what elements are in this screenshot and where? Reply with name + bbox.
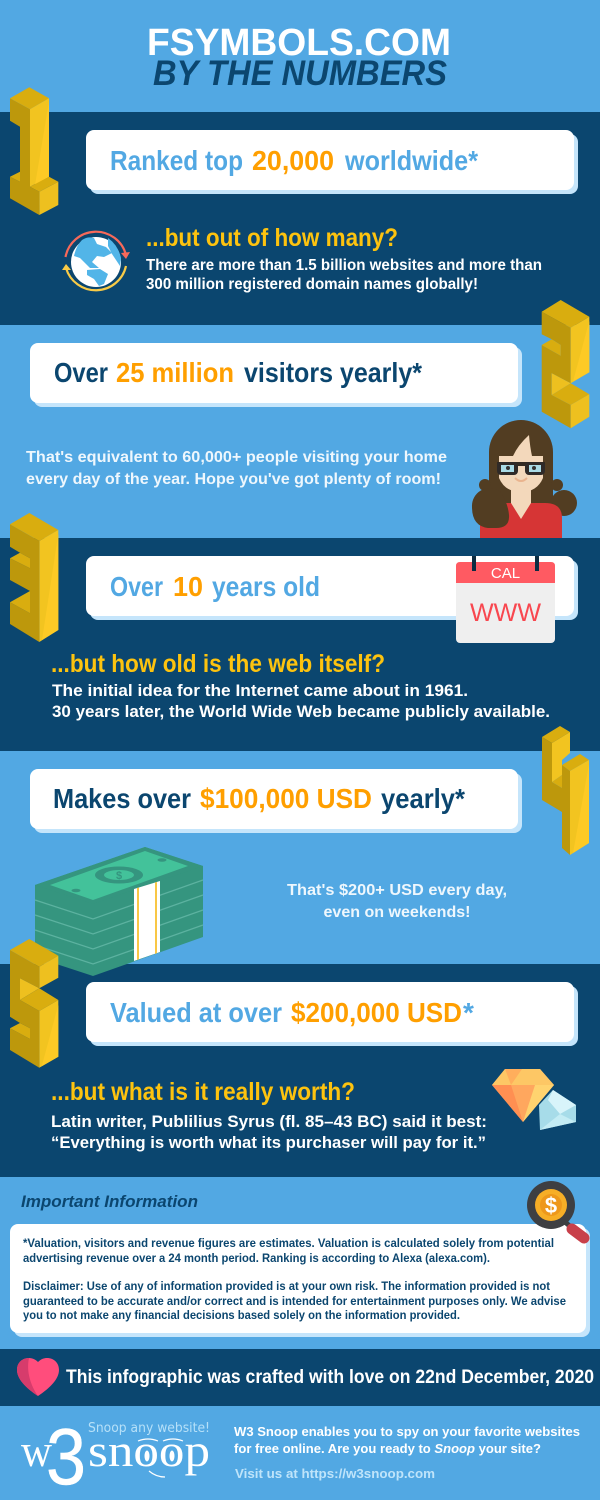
stat card: 25 million visitors: visitors yearly* [244, 357, 422, 388]
icon: diamonds [492, 1069, 576, 1130]
icon: heart [17, 1358, 59, 1396]
footer link: Visit us at https://w3snoop.com [235, 1467, 435, 1481]
subheading: ...but what is it really worth? [51, 1078, 355, 1106]
body text: That's $200+ USD every day, [287, 882, 507, 899]
icon: woman with glasses [472, 420, 577, 538]
body text: The initial idea for the Internet came about in 1961. [52, 682, 468, 700]
header panel [0, 0, 600, 112]
subtitle: BY THE NUMBERS [153, 54, 447, 93]
stat card: over 10 years: years old [212, 571, 320, 602]
panel: visitors [0, 325, 600, 538]
stat card: valued at $200,000 [86, 982, 578, 1046]
disclaimer card [10, 1224, 590, 1337]
icon: calendar: CAL [491, 565, 520, 582]
stat card: valued at $200,000: $200,000 USD [291, 997, 462, 1028]
title: FSYMBOLS.COM [147, 22, 451, 64]
panel: valuation [0, 964, 600, 1177]
icon: calendar [456, 556, 555, 643]
icon: globe with arrows [62, 232, 130, 290]
icon: magnifying glass with coin: $ [545, 1193, 557, 1218]
stat card: valued at $200,000: * [463, 997, 474, 1028]
disclaimer card: guaranteed to be accurate and/or correct and is intended for entertainment purposes only. We advise [23, 1296, 566, 1308]
panel: age [0, 538, 600, 751]
icon: stack of money: $ [116, 870, 122, 882]
body text: That's equivalent to 60,000+ people visiting your home [26, 449, 447, 466]
stat card: makes over $100,000: yearly* [381, 783, 465, 814]
body text [51, 1113, 487, 1152]
stat card: valued at $200,000: Valued at over [110, 997, 282, 1028]
panel: revenue [0, 751, 600, 964]
logo: w3snoop [21, 1412, 210, 1500]
stat card: makes over $100,000 [30, 769, 522, 833]
stat card: over 10 years: 10 [173, 571, 203, 602]
footer description [234, 1425, 580, 1456]
stat card: ranked top 20,000: Ranked top [110, 145, 243, 176]
panel: w3snoop footer [0, 1406, 600, 1500]
panel: crafted with love banner [0, 1349, 600, 1406]
panel: important information [0, 1177, 600, 1349]
body text [287, 882, 507, 921]
subheading: ...but how old is the web itself? [51, 650, 385, 678]
stat card: makes over $100,000: Makes over [53, 783, 191, 814]
body text: There are more than 1.5 billion websites and more than [146, 257, 542, 274]
logo: w3snoop: snoop [88, 1426, 210, 1476]
stat card: 25 million visitors: Over [54, 357, 108, 388]
stat card: ranked top 20,000: 20,000 [252, 145, 334, 176]
numeral 5 [10, 939, 58, 1068]
logo: w3snoop: w [21, 1425, 53, 1476]
logo: w3snoop: Snoop any website! [88, 1421, 210, 1436]
icon: calendar: WWW [470, 599, 541, 627]
disclaimer card: advertising revenue over a 24 month period. Ranking is according to Alexa (alexa.com). [23, 1253, 490, 1265]
panel: ranking [0, 112, 600, 325]
body text: every day of the year. Hope you've got plenty of room! [26, 471, 441, 488]
stat card: over 10 years: Over [110, 571, 163, 602]
footer description: W3 Snoop enables you to spy on your favorite websites [234, 1425, 580, 1439]
numeral 2 [542, 300, 589, 428]
stat card: ranked top 20,000: worldwide* [344, 145, 478, 176]
stat card: over 10 years [86, 556, 578, 620]
subheading: ...but out of how many? [146, 224, 398, 252]
body text: “Everything is worth what its purchaser will pay for it.” [51, 1134, 486, 1152]
body text: 30 years later, the World Wide Web became publicly available. [52, 703, 550, 721]
footer description: for free online. Are you ready to Snoop your site? [234, 1442, 541, 1456]
icon: stack of money [35, 847, 203, 976]
disclaimer card: *Valuation, visitors and revenue figures are estimates. Valuation is calculated solely from potential [23, 1238, 554, 1250]
body text: Latin writer, Publilius Syrus (fl. 85–43 BC) said it best: [51, 1113, 487, 1131]
numeral 3 [10, 513, 58, 642]
stat card: ranked top 20,000 [86, 130, 578, 194]
logo: w3snoop: 3 [46, 1412, 86, 1500]
numeral 1 [10, 87, 58, 215]
heading: Important Information [21, 1192, 198, 1211]
icon: magnifying glass with coin [527, 1181, 584, 1238]
stat card: 25 million visitors: 25 million [116, 357, 234, 388]
body text [52, 682, 550, 721]
disclaimer card: Disclaimer: Use of any of information provided is at your own risk. The information provided is not [23, 1281, 550, 1293]
numeral 4 [542, 726, 589, 855]
body text: 300 million registered domain names globally! [146, 276, 478, 293]
stat card: makes over $100,000: $100,000 USD [200, 783, 372, 814]
body text [26, 449, 447, 488]
disclaimer card: you to not make any financial decisions based solely on the information provided. [23, 1310, 460, 1322]
stat card: 25 million visitors [30, 343, 522, 407]
body text [146, 257, 542, 293]
body text: even on weekends! [324, 904, 470, 921]
